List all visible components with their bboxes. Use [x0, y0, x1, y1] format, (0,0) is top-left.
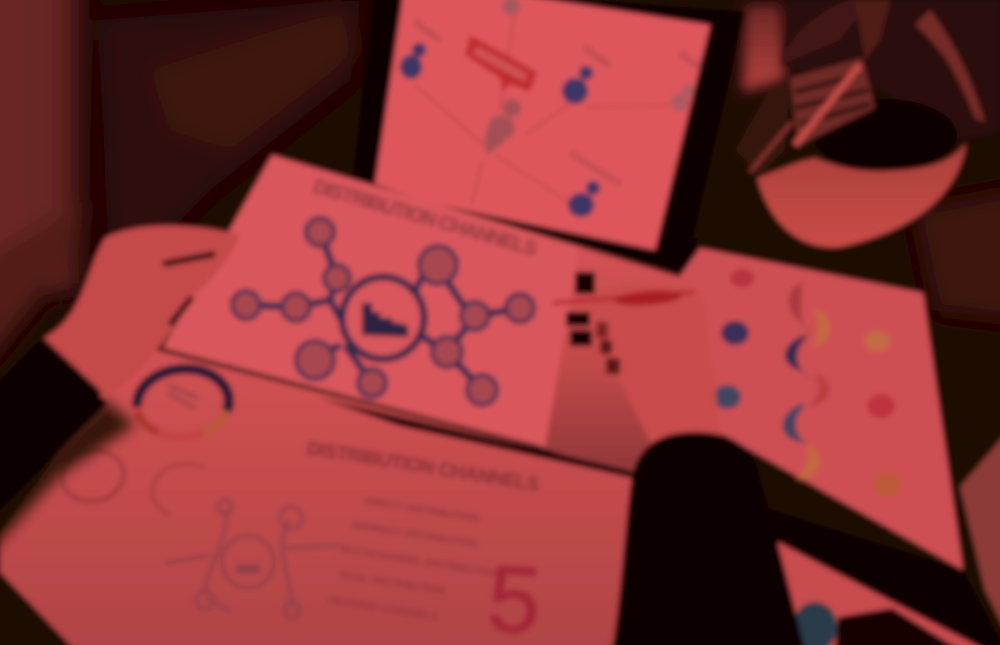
tablet: Dealer — [410, 17, 445, 46]
central factory icon — [342, 277, 424, 359]
blurred background furniture — [0, 0, 1000, 370]
C-shaped arc — [152, 464, 205, 515]
bottom paper list: REVERSE CHANNELS — [328, 594, 439, 623]
left hand and sleeve — [0, 226, 240, 515]
dark paper edge line — [320, 398, 632, 478]
bottom paper list — [328, 495, 499, 623]
fold and shadow beside the hand — [540, 244, 708, 478]
tablet: Consumers — [566, 147, 624, 190]
bottom-right lower paper and dark wedge — [740, 500, 1000, 645]
tablet profile icons — [400, 43, 600, 217]
striped leaf — [790, 58, 875, 146]
middle paper heading: DISTRIBUTION CHANNELS — [311, 176, 540, 261]
paper shadow near sleeve — [0, 400, 135, 552]
bottom paper list: DIRECT DISTRIBUTION — [364, 495, 481, 525]
background wall patch — [742, 5, 785, 92]
plant pot and leaves — [735, 0, 1000, 247]
faint network diagram — [165, 500, 340, 618]
tablet: Deal — [676, 49, 702, 72]
tablet: Dealer — [580, 43, 615, 72]
tablet screen — [375, 0, 710, 250]
donut chart — [134, 365, 232, 441]
pot soil — [813, 99, 957, 171]
bottom paper list: MULTICHANNEL DISTRIBUTION — [340, 543, 499, 580]
pen — [553, 292, 695, 303]
pot body — [757, 143, 966, 247]
right hand, pen and sleeve — [553, 272, 805, 645]
right paper — [670, 248, 963, 570]
bottom paper — [0, 345, 640, 645]
network diagram — [246, 232, 520, 390]
QR code mark — [566, 272, 620, 374]
bottom paper heading: DISTRIBUTION CHANNELS — [305, 438, 541, 496]
middle paper with network — [163, 155, 580, 447]
right side paper — [960, 435, 1000, 630]
tablet — [353, 0, 745, 286]
bottom paper list: DUAL DISTRIBUTION — [340, 569, 447, 598]
right sleeve — [612, 432, 805, 645]
small circle — [57, 445, 129, 507]
bottom paper list: INDIRECT DISTRIBUTION — [352, 519, 479, 551]
tablet callout — [465, 35, 537, 92]
